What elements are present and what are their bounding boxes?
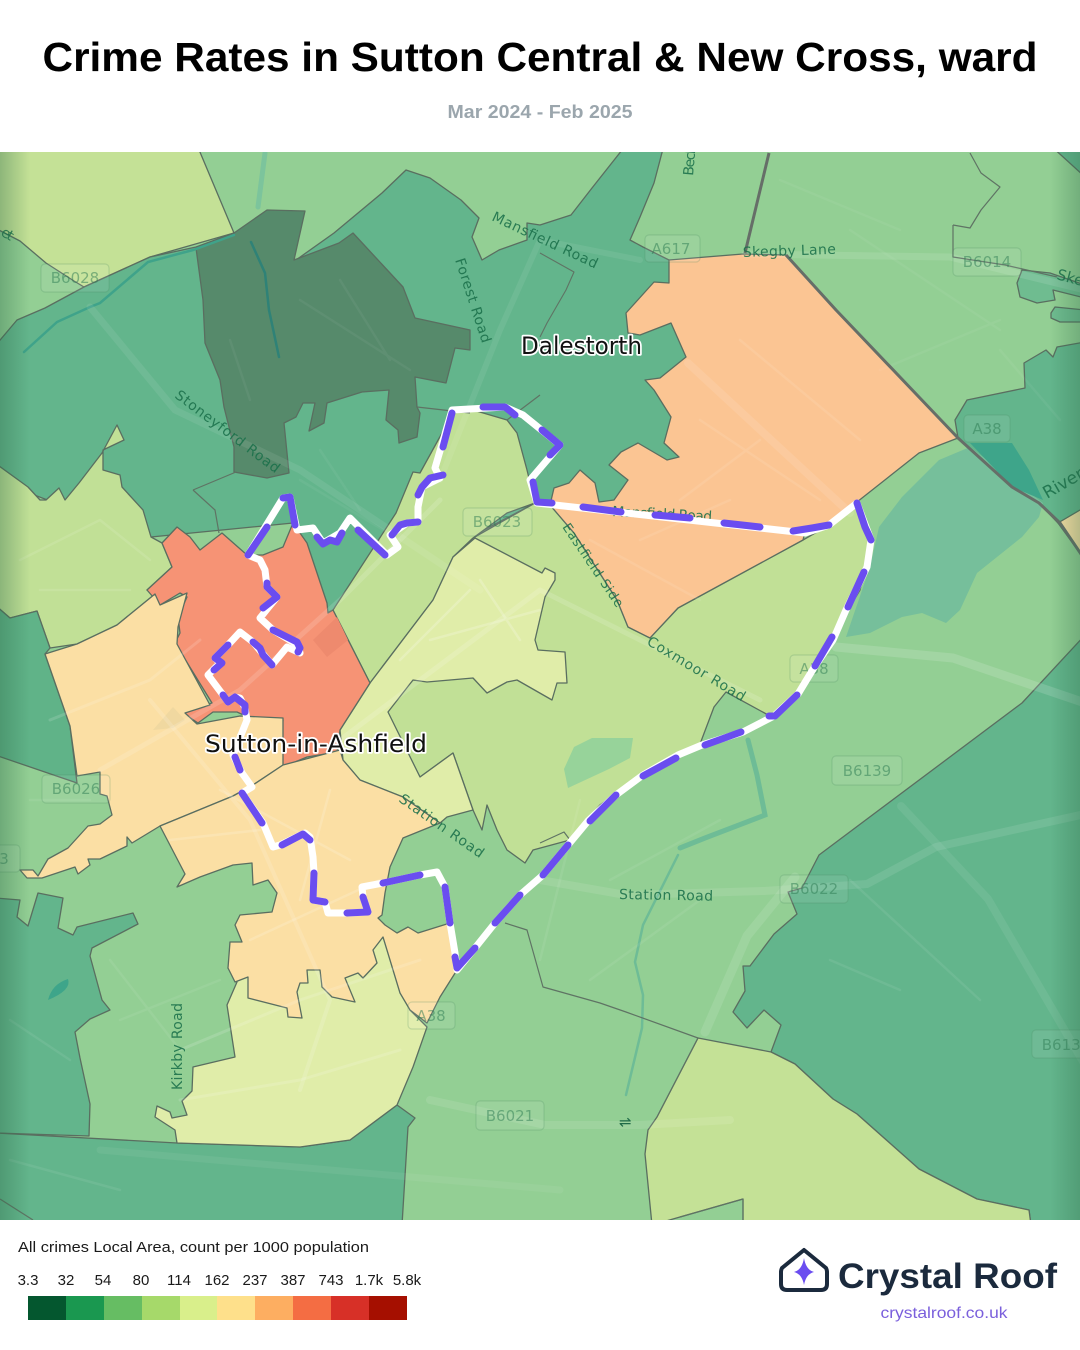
crime rate area polygons: [0, 145, 1080, 1225]
road name labels: Station Road: [619, 887, 713, 905]
legend tick labels: 162: [204, 1272, 230, 1289]
road name labels: Eastfield Side: [559, 521, 626, 610]
road number boxes: [0, 235, 1080, 1130]
road name labels: Kirkby Road: [170, 1003, 186, 1090]
road number boxes: A38: [799, 660, 829, 678]
legend: [18, 1240, 422, 1320]
road name labels: Station Road: [396, 791, 487, 862]
road number boxes: B6023: [473, 513, 521, 531]
website url: crystalroof.co.uk: [880, 1305, 1009, 1322]
legend tick labels: 237: [242, 1272, 268, 1289]
legend tick labels: 32: [58, 1272, 74, 1289]
ward boundary: purple dashes: [214, 407, 871, 968]
road name labels: Mansfield Road: [612, 504, 712, 525]
logo: Crystal Roof: [781, 1250, 1057, 1322]
place label: Sutton-in-Ashfield: Sutton-in-Ashfield: [205, 730, 427, 758]
streams: [24, 153, 765, 1095]
map base layer: [0, 152, 1080, 1220]
road number boxes: B6022: [790, 880, 838, 898]
road name labels: Stoneyford Road: [172, 387, 283, 477]
road number boxes: B6028: [51, 269, 99, 287]
map edge vignette: [0, 152, 1080, 1220]
ward boundary: white base line: [208, 407, 871, 970]
title: Crime Rates in Sutton Central & New Cross, ward: [42, 34, 1038, 80]
road network: [10, 180, 1080, 1190]
internal boundary lines and major divides: [0, 153, 1080, 1225]
road number boxes: A38: [972, 420, 1002, 438]
road name labels: Beck: [681, 144, 700, 176]
legend tick labels: 114: [167, 1272, 191, 1289]
road number boxes: B6026: [52, 780, 100, 798]
legend tick labels: 387: [280, 1272, 306, 1289]
road name labels: Mansfield Road: [489, 209, 600, 272]
legend tick labels: 1.7k: [355, 1272, 384, 1289]
road number boxes: B6139: [843, 762, 891, 780]
legend tick labels: 80: [133, 1272, 149, 1289]
road number boxes: A38: [416, 1007, 446, 1025]
road name labels: Skegby Lane: [743, 242, 836, 261]
road name labels: Forest Road: [451, 256, 494, 345]
road name labels: Coxmoor Road: [644, 634, 748, 705]
legend tick labels: 5.8k: [393, 1272, 422, 1289]
road number boxes: A617: [652, 240, 690, 258]
legend tick labels: 54: [95, 1272, 111, 1289]
water: lake and pond: [48, 443, 1043, 1000]
road name labels: ⇌: [619, 1113, 632, 1131]
road number boxes: B6014: [963, 253, 1011, 271]
legend title: All crimes Local Area, count per 1000 population: [18, 1240, 369, 1256]
road number boxes: B6021: [486, 1107, 534, 1125]
place label: Dalestorth: Dalestorth: [521, 332, 642, 360]
subtitle: date range: Mar 2024 - Feb 2025: [448, 101, 632, 122]
legend colour scale: [28, 1296, 407, 1320]
logo wordmark: Crystal Roof: [838, 1257, 1057, 1296]
icon: house with star: [781, 1250, 827, 1290]
legend tick labels: [18, 1272, 422, 1289]
legend tick labels: 743: [318, 1272, 344, 1289]
road name labels: [0, 144, 1080, 1131]
legend tick labels: 3.3: [18, 1272, 38, 1289]
